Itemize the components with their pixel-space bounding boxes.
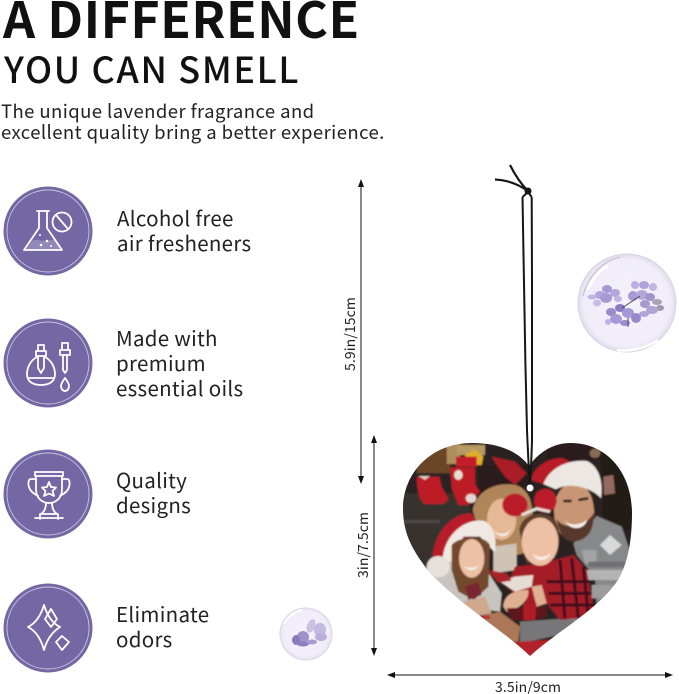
label: 3in/7.5cm: 3in/7.5cm — [353, 512, 373, 578]
feature text: odors — [116, 623, 173, 653]
phone and father hand — [462, 596, 492, 616]
feature text: Quality — [116, 464, 187, 494]
feature text: Made with — [116, 322, 218, 352]
feature: quality designs — [4, 450, 191, 538]
feature: eliminate odors — [4, 584, 209, 672]
icon: sparkles — [4, 584, 92, 672]
feature text: air fresheners — [117, 227, 251, 257]
feature text: premium — [116, 347, 206, 377]
plush and hands — [500, 575, 533, 592]
label: 5.9in/15cm: 5.9in/15cm — [340, 297, 360, 371]
girl 1 — [428, 560, 502, 612]
intro text — [1, 98, 385, 145]
hanging cord — [495, 165, 532, 488]
feature text: Eliminate — [116, 598, 209, 628]
stockings — [417, 477, 449, 504]
bubble: lavender small — [280, 608, 332, 660]
man's sweater — [568, 515, 630, 622]
icon: trophy — [4, 450, 92, 538]
feature text: designs — [116, 489, 191, 519]
icon: oil bottle and dropper — [4, 318, 92, 408]
antlers — [502, 494, 528, 516]
feature text: essential oils — [116, 372, 243, 402]
bubble: lavender large — [578, 254, 676, 352]
feature text — [117, 202, 251, 257]
man's hat — [531, 458, 573, 485]
arrow: heart height — [371, 435, 377, 656]
girl 2 plaid shirt — [507, 555, 595, 620]
subtitle: YOU CAN SMELL: YOU CAN SMELL — [3, 42, 300, 94]
feature text: Alcohol free — [117, 202, 234, 232]
man's head — [554, 482, 594, 541]
ornament hole — [526, 484, 534, 492]
feature text — [116, 322, 243, 402]
arrow: total height — [358, 179, 364, 484]
feature: alcohol free — [4, 186, 251, 276]
intro text: The unique lavender fragrance and — [1, 98, 315, 124]
woman — [473, 484, 533, 557]
heart photo ornament — [400, 440, 641, 660]
feature: essential oils — [4, 318, 243, 408]
intro text: excellent quality bring a better experience. — [1, 119, 385, 145]
feature text — [116, 598, 209, 653]
feature text — [116, 464, 191, 519]
girl 2 head — [519, 514, 559, 563]
arrow: heart width — [387, 672, 673, 678]
icon: flask with no symbol — [4, 186, 92, 276]
